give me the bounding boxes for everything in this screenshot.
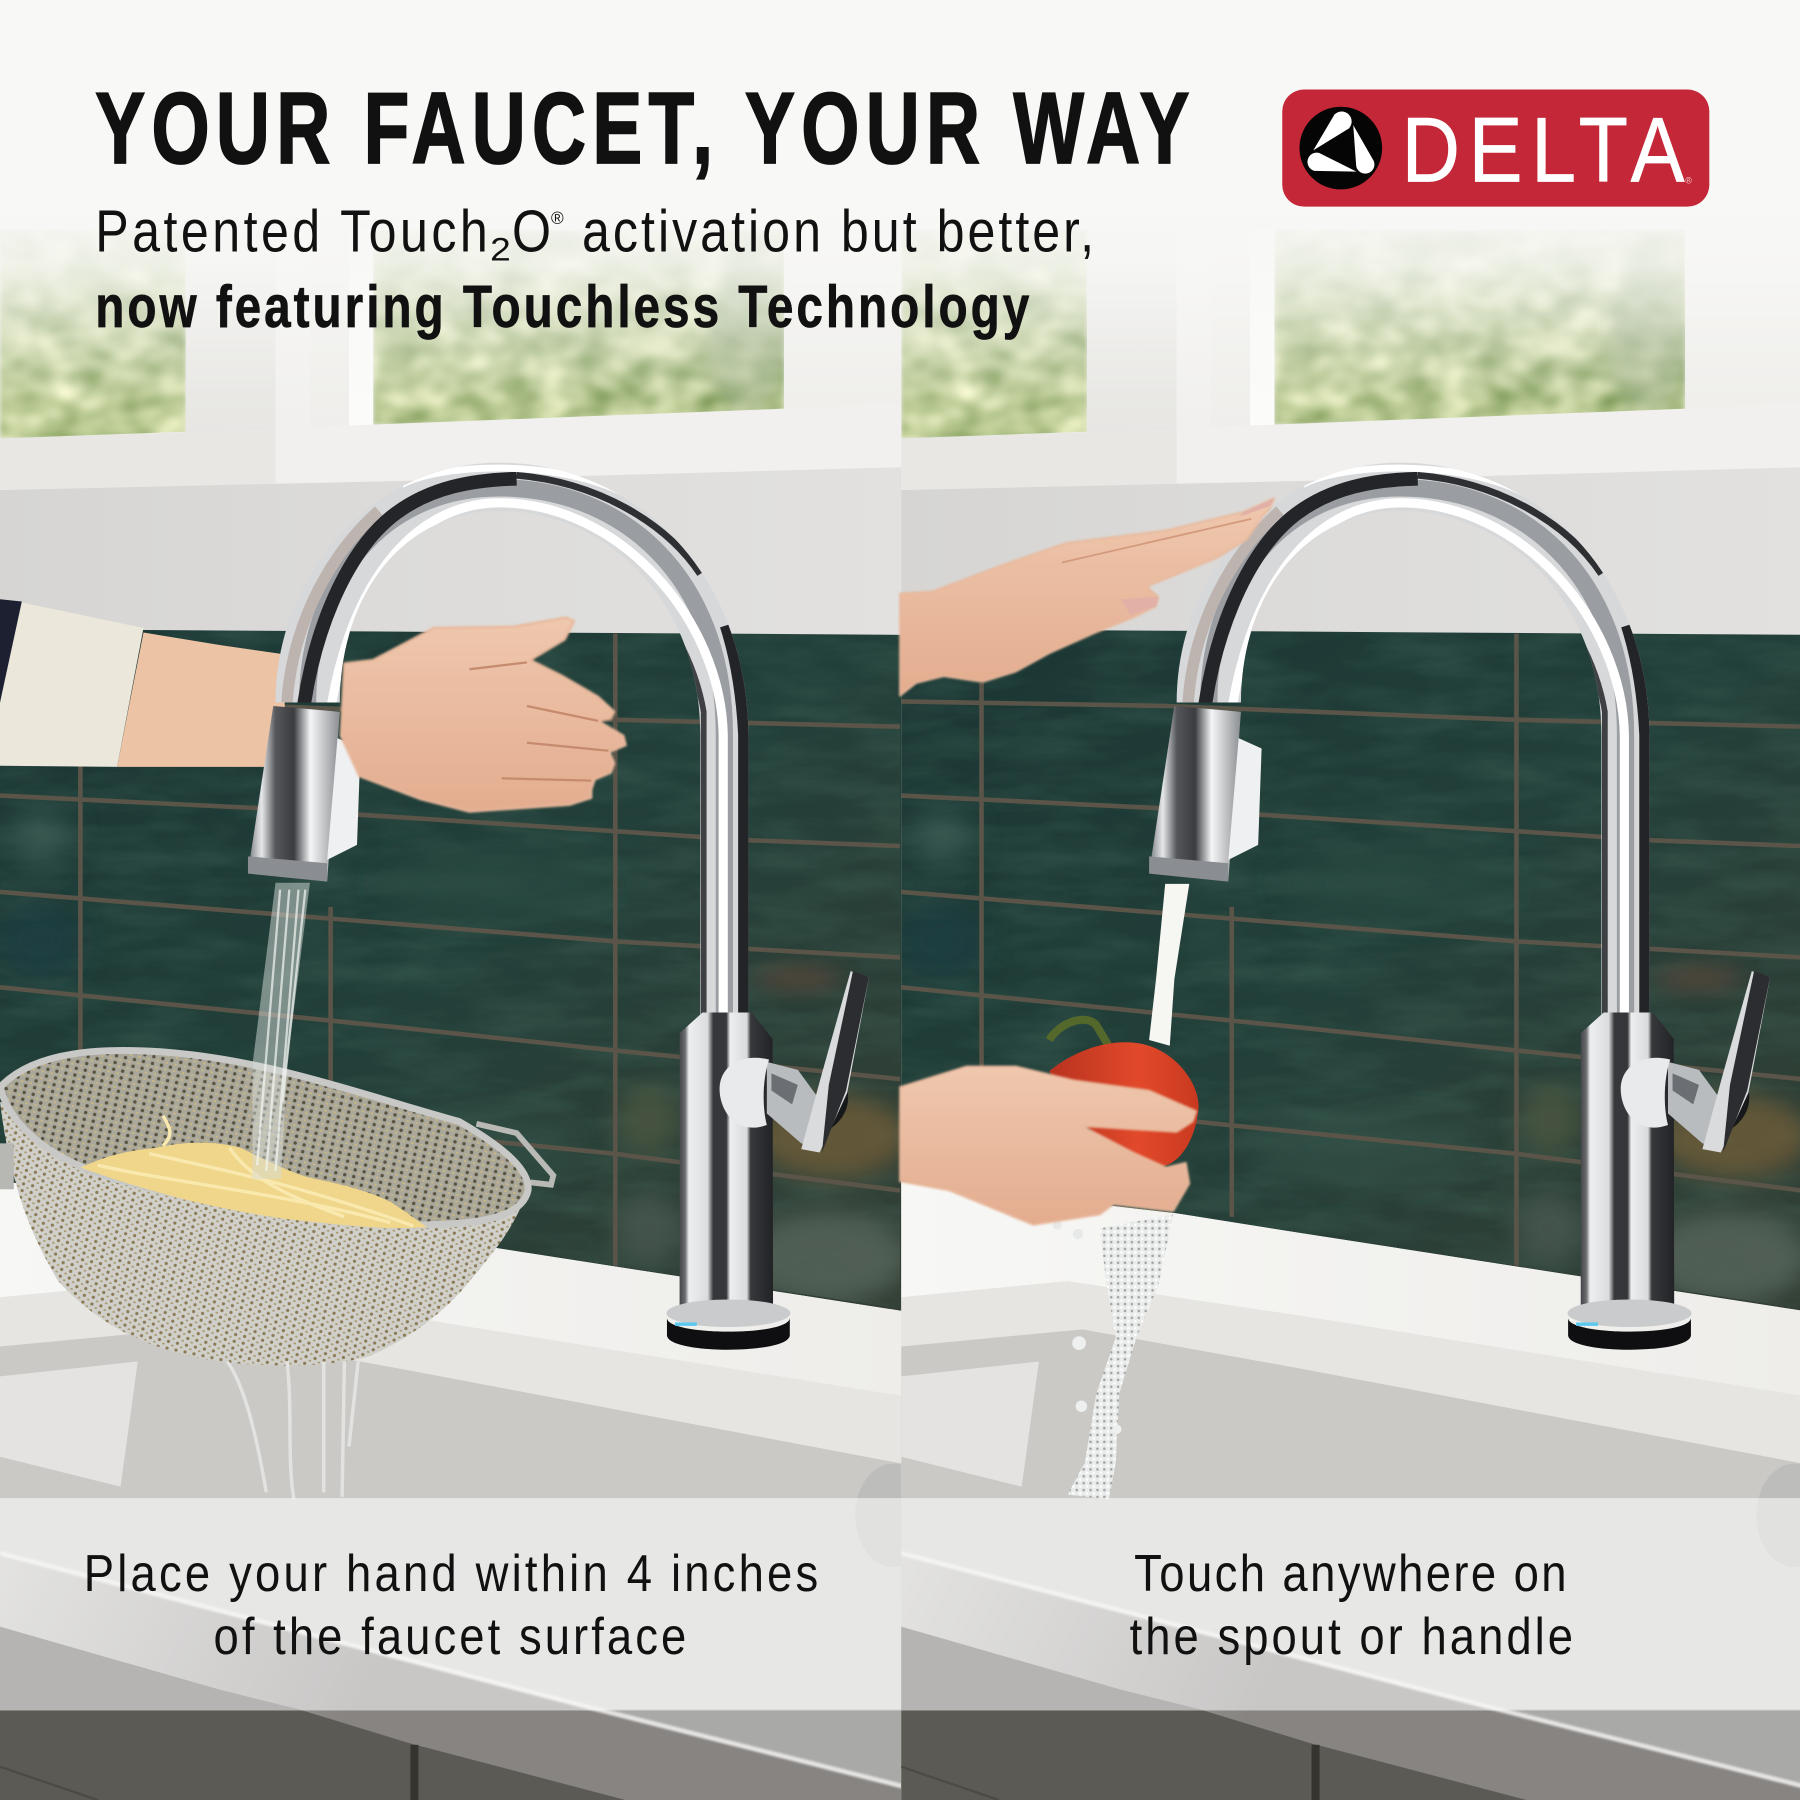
subtitle line 1: ® [551, 208, 564, 228]
Delta logo: ® [1685, 176, 1692, 186]
colander drip water [227, 1361, 358, 1499]
caption right [1130, 1545, 1573, 1666]
right water stream and splash [1053, 884, 1189, 1499]
tomato [1049, 1020, 1199, 1166]
caption band left [0, 1498, 901, 1710]
subtitle line 1: 2 [490, 232, 511, 268]
subtitle line 1: activation but better, [582, 197, 1094, 264]
subtitle line 2: now featuring Touchless Technology [95, 274, 1029, 340]
left arm and sleeve [0, 599, 285, 767]
Delta logo [1282, 90, 1709, 207]
faucet right [1149, 463, 1770, 1350]
colander with spaghetti [0, 1050, 553, 1365]
subtitle line 1 [95, 197, 1094, 268]
panel: right kitchen photo [901, 0, 1800, 1800]
right lower hand holding tomato [900, 1066, 1196, 1225]
colander water stream [253, 883, 310, 1179]
caption left [84, 1545, 818, 1666]
caption right: the spout or handle [1130, 1609, 1573, 1666]
caption left: Place your hand within 4 inches [84, 1545, 818, 1603]
title: YOUR FAUCET, YOUR WAY [95, 72, 1189, 185]
subtitle line 1: Patented Touch [95, 197, 488, 264]
caption right: Touch anywhere on [1134, 1545, 1567, 1603]
left hand near faucet [341, 618, 626, 812]
logo mark [1299, 107, 1382, 189]
right upper hand touching spout [900, 498, 1274, 696]
subtitle line 1: O [512, 197, 551, 264]
caption band right [901, 1498, 1800, 1710]
top white wash [0, 0, 1800, 442]
faucet left [248, 463, 869, 1350]
panel: left kitchen photo [0, 0, 931, 1800]
caption left: of the faucet surface [214, 1609, 686, 1666]
Delta logo: DELTA [1402, 100, 1685, 202]
